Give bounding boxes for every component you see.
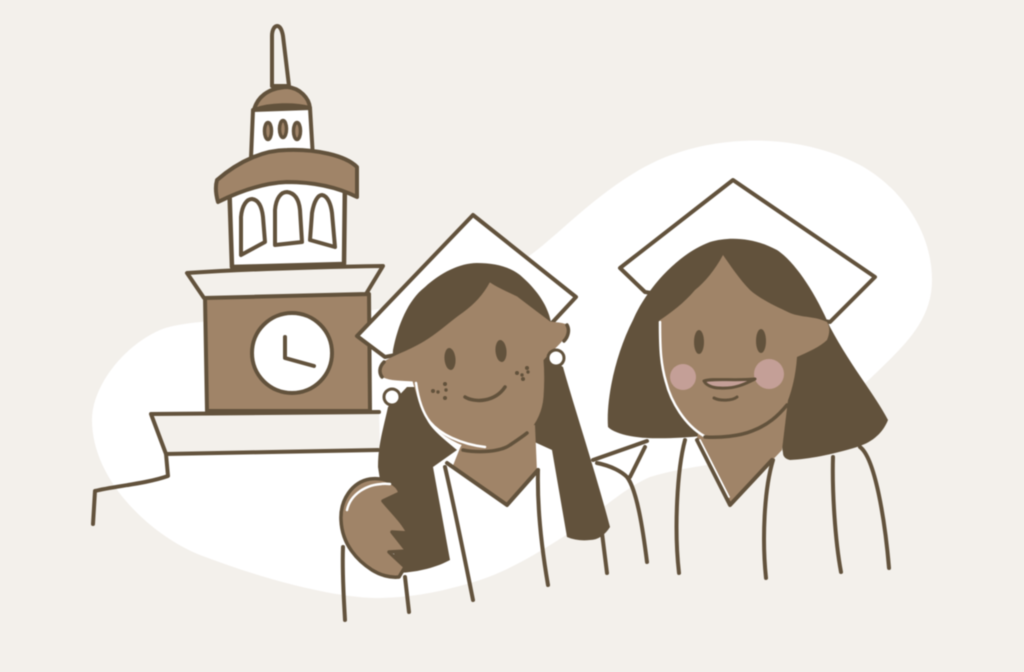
graduate on the left bbox=[341, 215, 610, 620]
right graduate face highlight bbox=[660, 322, 704, 436]
left graduate earrings bbox=[384, 350, 564, 405]
right graduate neck and collar bbox=[697, 400, 788, 505]
left graduate cap bbox=[357, 215, 576, 357]
tower cornice bbox=[187, 266, 383, 298]
right graduate face bbox=[660, 255, 829, 437]
cupola bbox=[251, 87, 313, 158]
left graduate hand on shoulder bbox=[341, 479, 408, 577]
clock tower bbox=[93, 26, 383, 524]
right graduate hair bbox=[608, 239, 888, 460]
right graduate chin line bbox=[705, 405, 787, 437]
tower base platform bbox=[93, 412, 380, 524]
graduate on the right bbox=[593, 180, 889, 578]
left graduate ear outline bbox=[380, 325, 568, 377]
left graduate collar bbox=[447, 463, 538, 505]
right graduate gown lines bbox=[593, 440, 889, 578]
white background blob bbox=[92, 141, 932, 598]
tower body bbox=[205, 294, 370, 411]
left graduate right lock of hair bbox=[528, 355, 610, 540]
right graduate cheeks bbox=[670, 359, 784, 390]
right graduate cap bbox=[620, 180, 875, 322]
left graduate gown lines bbox=[343, 467, 607, 620]
left graduate face bbox=[380, 283, 568, 449]
roof band bbox=[216, 150, 357, 202]
left graduate eyes bbox=[444, 340, 507, 370]
left graduate neck bbox=[452, 425, 537, 505]
left graduate hair top bbox=[392, 263, 551, 370]
right graduate eyes bbox=[694, 329, 766, 354]
left graduate smile bbox=[465, 387, 505, 400]
clock face bbox=[252, 313, 332, 393]
right graduate mouth bbox=[704, 379, 755, 400]
left graduate face highlight bbox=[416, 383, 485, 447]
colonnade bbox=[229, 178, 345, 267]
left graduate left lock of hair bbox=[378, 387, 457, 573]
left graduate chin line bbox=[463, 433, 527, 452]
spire bbox=[272, 26, 289, 86]
left graduate freckles bbox=[431, 366, 530, 400]
